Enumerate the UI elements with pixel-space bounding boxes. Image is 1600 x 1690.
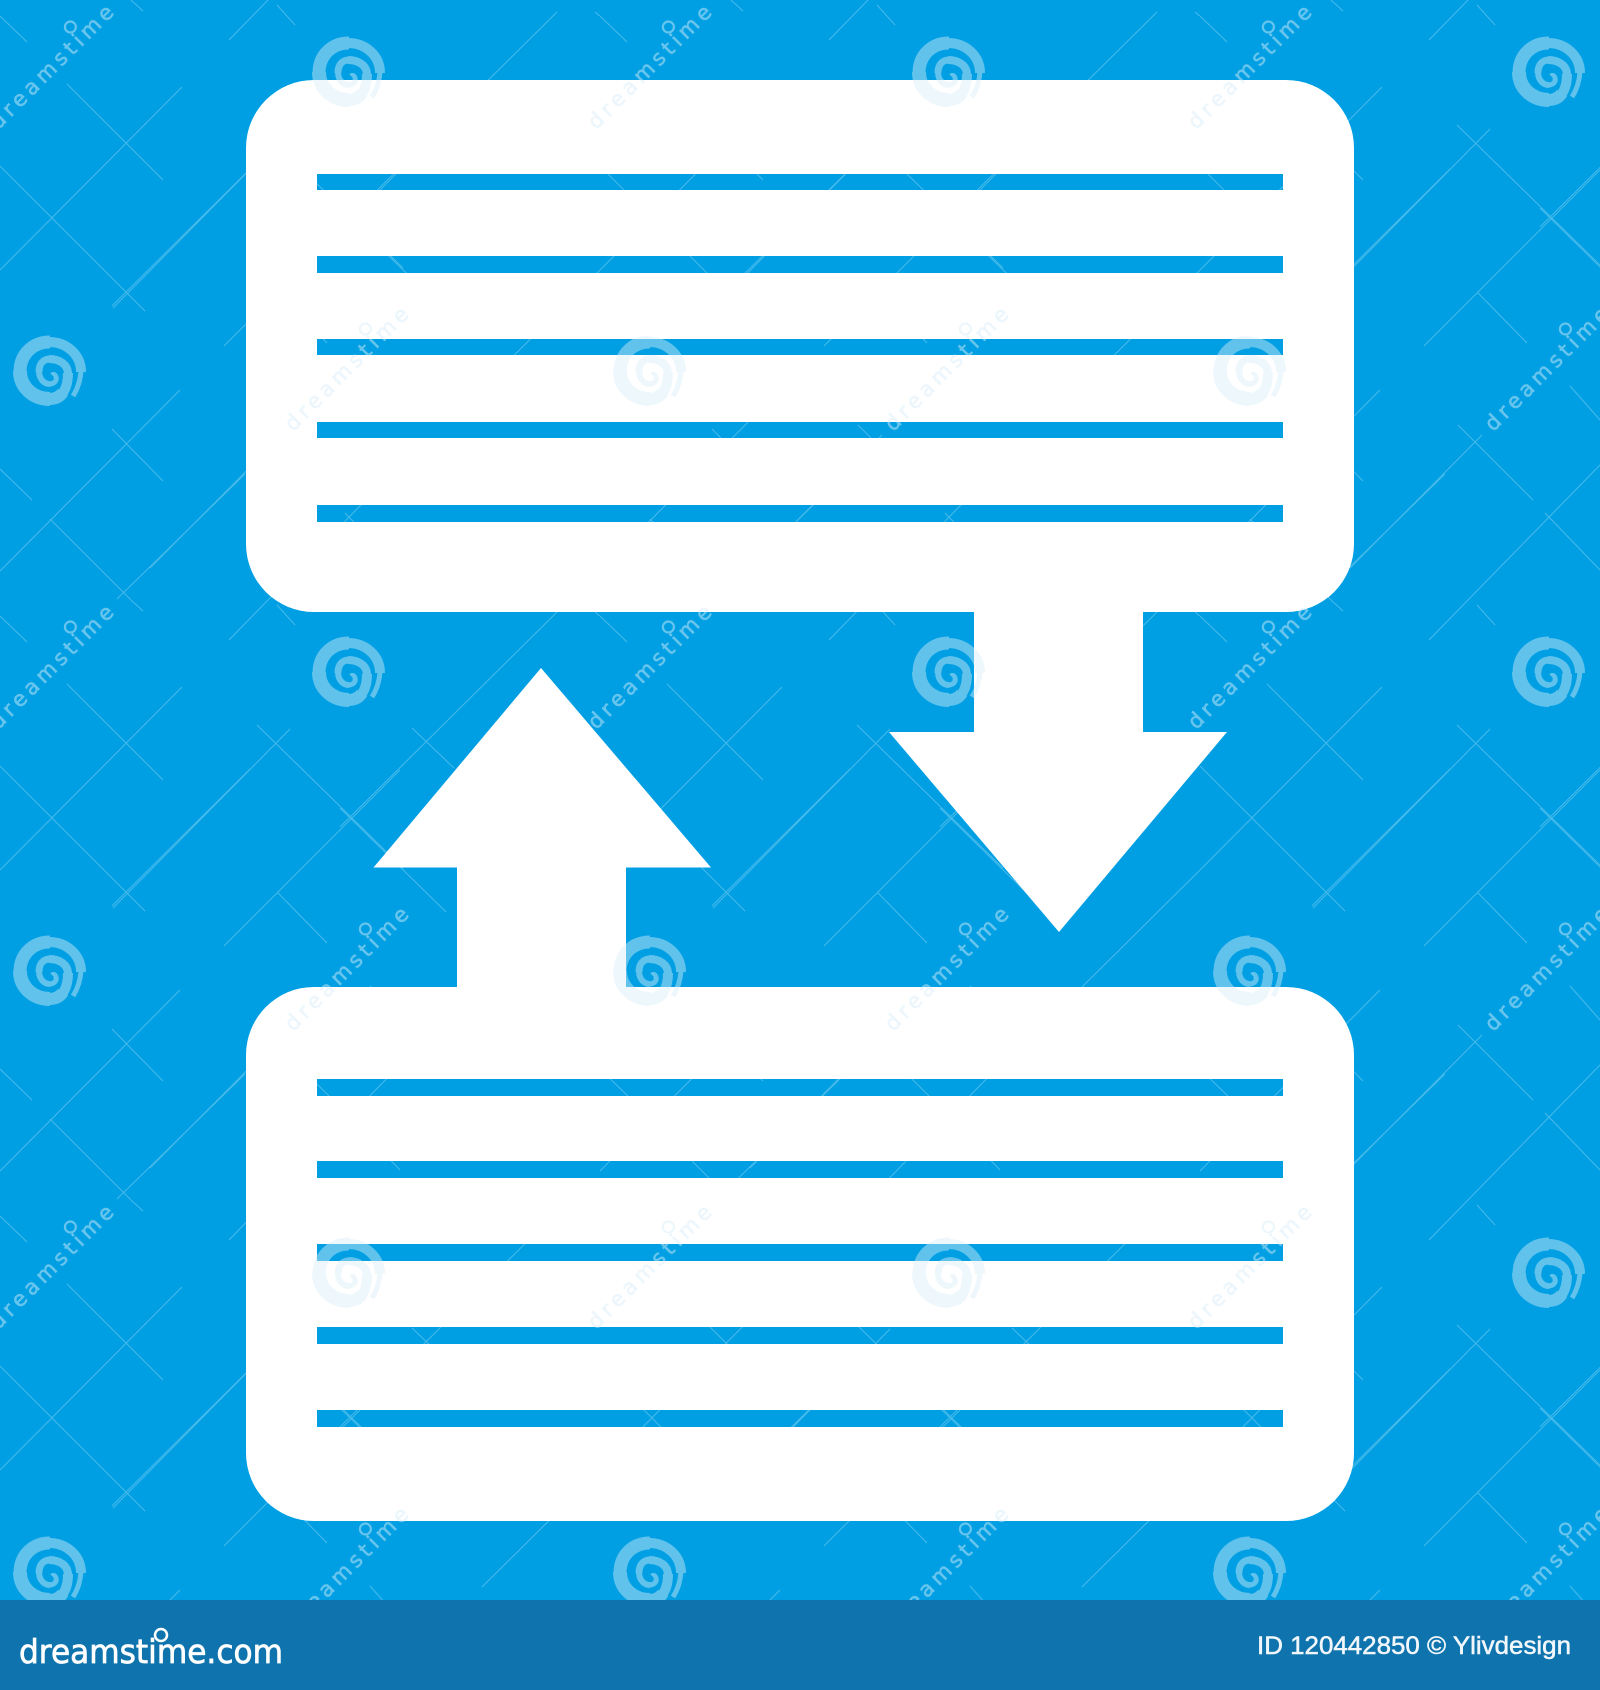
watermark: dreamstime text: dreamstime — [1183, 600, 1316, 734]
watermark: dreamstime text: dreamstime — [583, 600, 716, 734]
watermark: dreamstime text: dreamstime — [583, 1200, 716, 1334]
panel: bottom text card — [246, 987, 1354, 1521]
watermark: dreamstime text: dreamstime — [280, 1502, 413, 1636]
watermark: dreamstime text: dreamstime — [583, 0, 716, 134]
watermark: dreamstime text: dreamstime — [1183, 0, 1316, 134]
watermark: dreamstime text: dreamstime — [880, 1502, 1013, 1636]
arrow: up from bottom card — [374, 668, 711, 990]
footer logo: dreamstime.com: dreamstime.com — [19, 1632, 283, 1671]
watermark: dreamstime text: dreamstime — [280, 902, 413, 1036]
panel: top text card — [246, 80, 1354, 612]
watermark: dreamstime text: dreamstime — [1183, 1200, 1316, 1334]
text lines: top card — [317, 174, 1283, 522]
footer bar — [0, 1600, 1600, 1690]
text lines: bottom card — [317, 1079, 1283, 1427]
watermark: dreamstime text: dreamstime — [280, 302, 413, 436]
arrow: down from top card — [889, 610, 1227, 932]
watermark: dreamstime text: dreamstime — [880, 902, 1013, 1036]
watermark: dreamstime text: dreamstime — [880, 302, 1013, 436]
footer credit: ID 120442850 © Ylivdesign — [1257, 1632, 1571, 1660]
